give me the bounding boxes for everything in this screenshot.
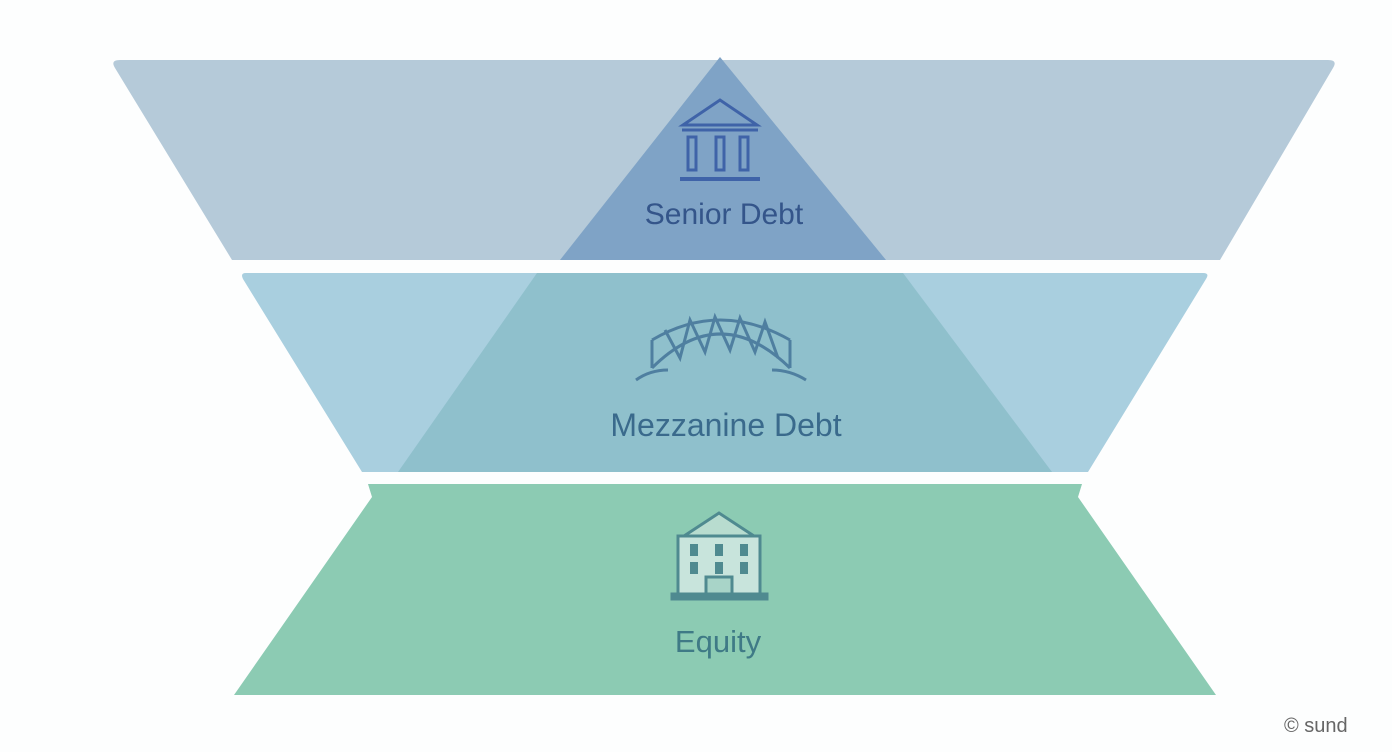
label: Mezzanine Debt: Mezzanine Debt [610,407,842,443]
icon: building [672,513,767,599]
panel: senior debt band [113,57,1335,260]
panel: mezzanine debt band [242,273,1207,472]
icon: bank [680,100,760,179]
icon: bridge [636,317,806,380]
watermark: © sund [1284,715,1348,737]
label: Senior Debt: Senior Debt [645,198,804,231]
label: Equity: Equity [675,624,762,659]
mezzanine inner trapezoid [398,273,1052,472]
panel: equity band [234,484,1216,695]
senior debt triangle [560,57,886,260]
